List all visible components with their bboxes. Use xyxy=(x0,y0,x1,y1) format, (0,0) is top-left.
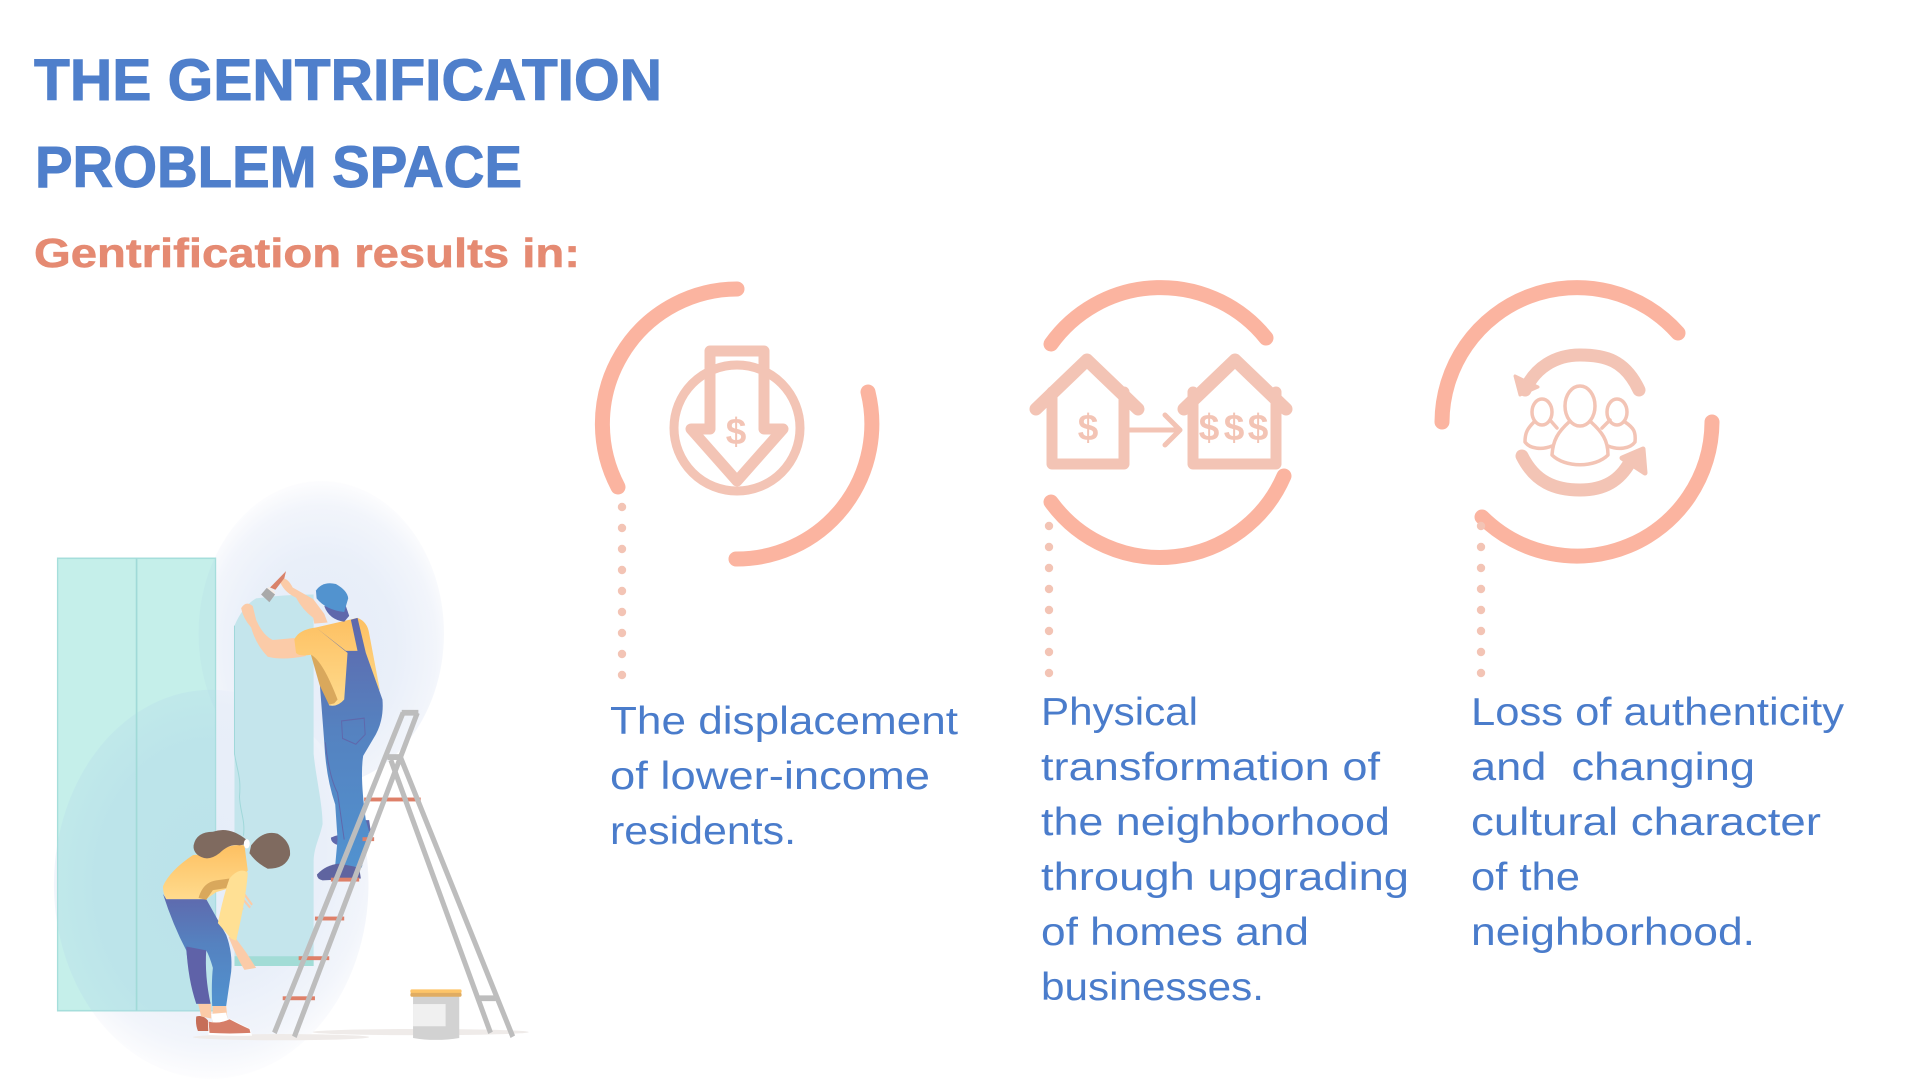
text 2: of homes and xyxy=(1041,911,1309,954)
text 1: The displacement xyxy=(610,700,958,743)
text 3: cultural character xyxy=(1471,801,1821,844)
ladder xyxy=(274,713,513,1037)
illustration: couple hanging wallpaper xyxy=(54,481,529,1079)
dotted connector 3 xyxy=(1477,522,1485,677)
paint bucket xyxy=(410,989,462,1040)
background blobs xyxy=(54,481,444,1079)
text 1: of lower-income xyxy=(610,755,930,798)
icon: houses: $ xyxy=(1078,407,1099,448)
dotted connector 1 xyxy=(618,503,626,679)
text 3: of the xyxy=(1471,856,1580,899)
arc ring 3 xyxy=(1442,288,1712,556)
icon: houses: $ xyxy=(1224,407,1245,448)
icon: houses xyxy=(1036,360,1286,464)
icon: dollar arrow down: $ xyxy=(726,411,747,452)
icon: houses: $ xyxy=(1199,407,1220,448)
wallpaper strip being hung xyxy=(234,594,323,966)
man on ladder xyxy=(241,571,383,880)
text 2: through upgrading xyxy=(1041,856,1409,899)
title xyxy=(34,48,662,200)
ground shadows xyxy=(193,1029,529,1040)
wall panel xyxy=(56,558,216,1012)
arc ring 1 xyxy=(602,289,872,559)
text 3: neighborhood. xyxy=(1471,911,1755,954)
title: THE GENTRIFICATION xyxy=(34,48,662,113)
title: PROBLEM SPACE xyxy=(35,135,522,200)
woman xyxy=(163,830,290,1036)
panel: physical transformation xyxy=(1036,288,1409,1009)
panel: displacement xyxy=(602,289,958,853)
text 3 xyxy=(1471,691,1845,954)
arc ring 2 xyxy=(1051,288,1284,557)
dotted connector 2 xyxy=(1045,522,1053,677)
text 3: and changing xyxy=(1471,746,1755,789)
panel: cultural loss xyxy=(1442,288,1845,954)
text 2: Physical xyxy=(1041,691,1198,734)
text 3: Loss of authenticity xyxy=(1471,691,1845,734)
icon: dollar arrow down xyxy=(674,351,800,491)
text 2 xyxy=(1041,691,1409,1009)
text 2: the neighborhood xyxy=(1041,801,1390,844)
text 2: transformation of xyxy=(1041,746,1380,789)
icon: houses: $ xyxy=(1248,407,1269,448)
text 1: residents. xyxy=(610,810,796,853)
text 1 xyxy=(610,700,958,853)
text 2: businesses. xyxy=(1041,966,1264,1009)
icon: people cycle xyxy=(1515,355,1645,490)
subtitle: Gentrification results in: xyxy=(34,230,580,276)
